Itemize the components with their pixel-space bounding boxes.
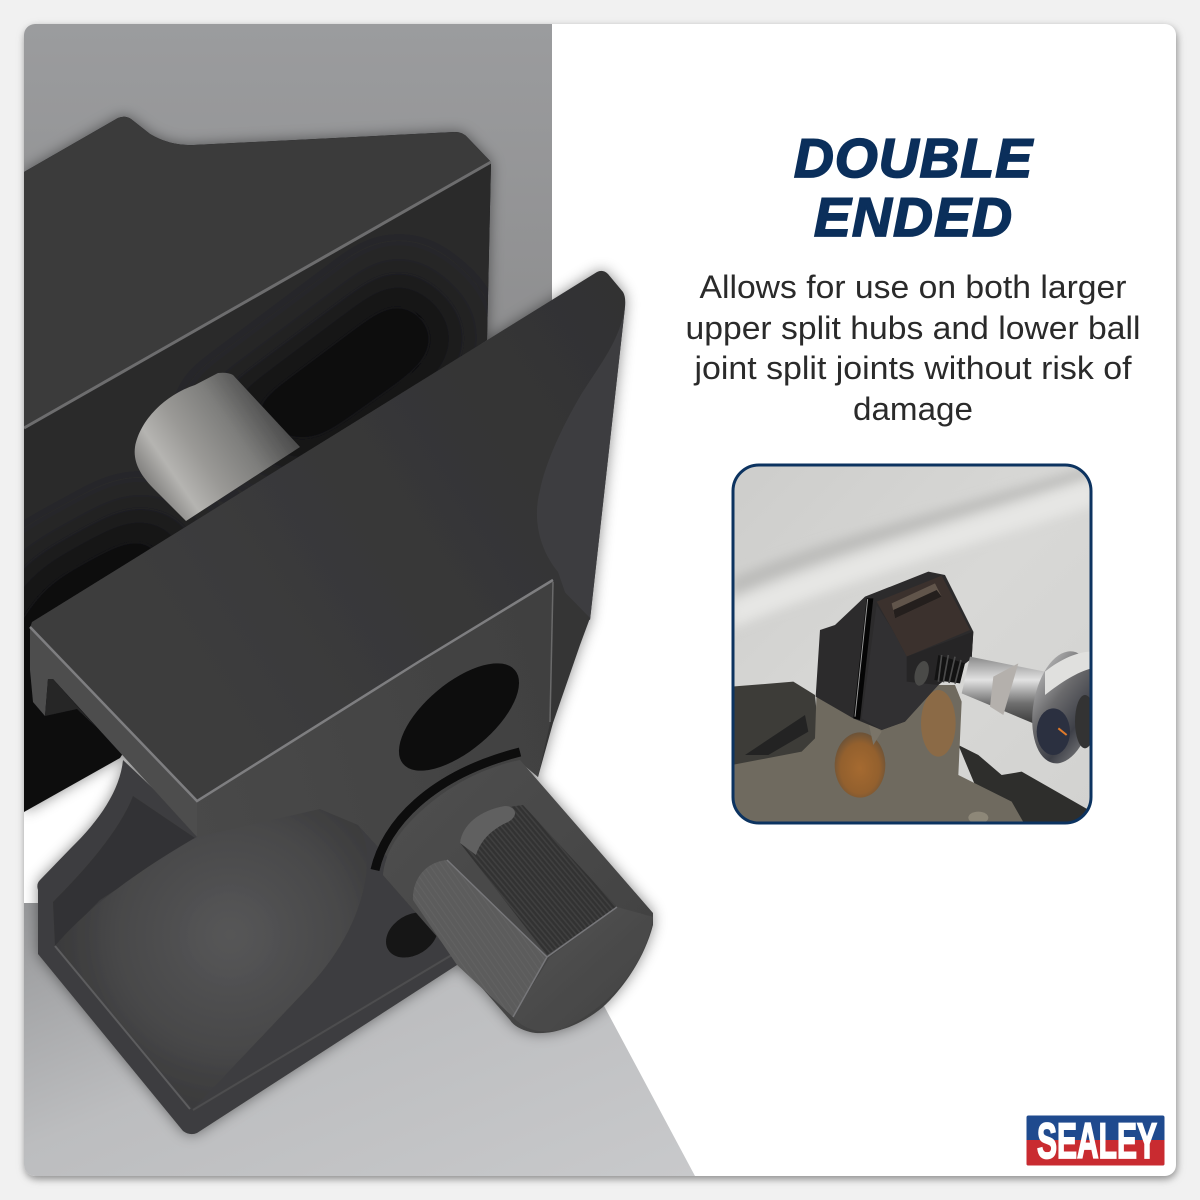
product photo: double ended tool	[0, 117, 653, 1134]
blurred background bands	[732, 465, 1095, 628]
inset border	[733, 465, 1091, 823]
lower bore hole	[386, 912, 436, 958]
panel: product photo background	[24, 24, 695, 1176]
body text: upper split hubs and lower ball	[686, 310, 1140, 346]
inset background	[733, 465, 1091, 823]
back jaw plate	[0, 117, 491, 812]
heading: DOUBLE	[794, 127, 1034, 189]
heading	[794, 127, 1034, 248]
heading: ENDED	[814, 186, 1012, 248]
lower curved body	[37, 760, 530, 1134]
inset photo: tool fitted on hub	[732, 465, 1103, 825]
inset socket and ratchet	[962, 651, 1090, 764]
jaw bore hole	[399, 663, 519, 771]
front jaw side faces	[30, 580, 590, 860]
body text: joint split joints without risk of	[693, 350, 1133, 386]
front jaw top face	[30, 271, 625, 800]
body text: damage	[853, 391, 973, 427]
hex bolt	[375, 752, 653, 1033]
body text: Allows for use on both larger	[700, 269, 1127, 305]
body text	[686, 269, 1140, 427]
inset tool	[816, 572, 973, 730]
hub casting	[732, 682, 1092, 825]
guide pin	[135, 373, 300, 521]
